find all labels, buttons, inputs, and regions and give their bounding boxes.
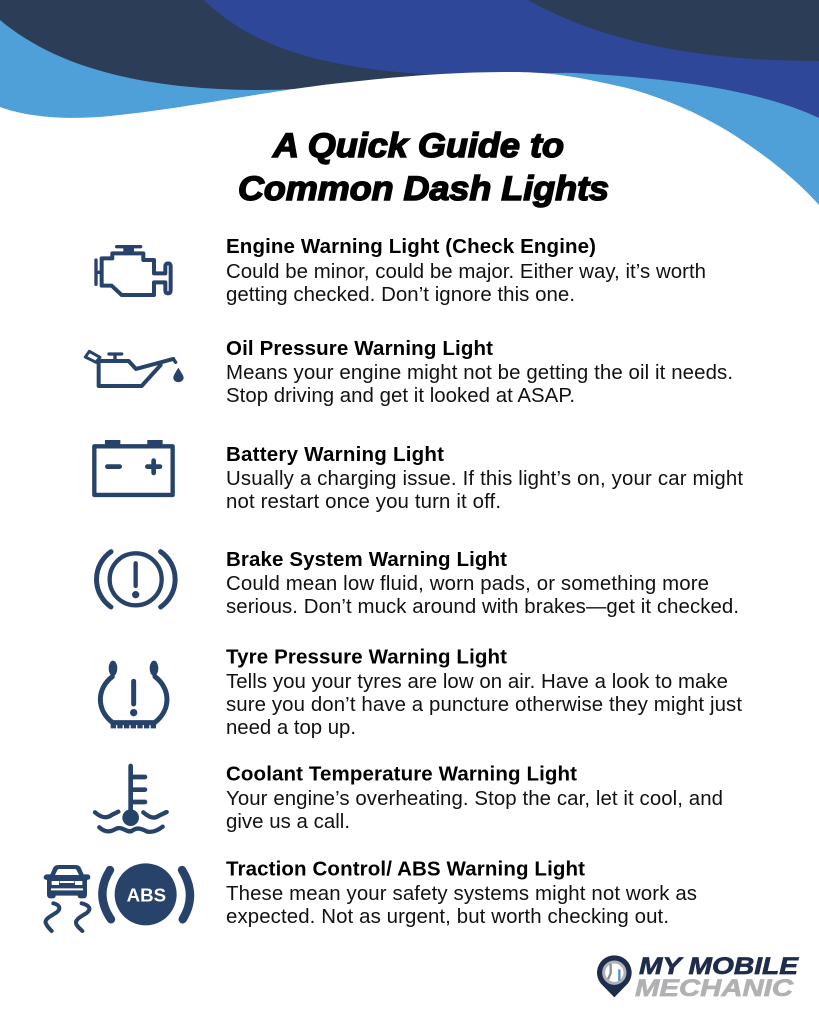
title: Common Dash Lights	[238, 170, 609, 208]
icon: tyre	[100, 661, 167, 725]
icon: ABS: ABS	[127, 884, 166, 905]
header wave background	[0, 0, 819, 240]
item: traction control and ABS text: These mean your safety systems might not work as	[226, 883, 697, 905]
item: brake system text: Brake System Warning Light	[226, 548, 507, 571]
item: brake system text: Could mean low fluid, worn pads, or something more	[226, 573, 709, 595]
icon: coolant	[95, 766, 167, 832]
logo	[597, 953, 799, 1002]
logo text	[635, 953, 799, 1002]
title	[238, 127, 609, 208]
icon: battery	[94, 440, 173, 495]
item: tyre pressure text: need a top up.	[226, 717, 356, 739]
item: engine warning light text: Engine Warning Light (Check Engine)	[226, 235, 596, 258]
icon: logo location pin	[597, 955, 632, 997]
item: tyre pressure text: sure you don’t have a puncture otherwise they might just	[226, 694, 742, 716]
item: engine warning light text: getting checked. Don’t ignore this one.	[226, 284, 575, 306]
icon: ABS	[102, 863, 190, 925]
logo text: MY MOBILE	[639, 953, 799, 980]
item: coolant temperature text: Your engine’s overheating. Stop the car, let it cool, and	[226, 788, 723, 810]
item: oil pressure text: Oil Pressure Warning Light	[226, 337, 493, 360]
item: battery text: Usually a charging issue. If this light’s on, your car might	[226, 468, 743, 490]
item: traction control and ABS text: Traction Control/ ABS Warning Light	[226, 858, 585, 880]
item: tyre pressure text: Tells you your tyres are low on air. Have a look to make	[226, 671, 728, 693]
icon: brake	[97, 552, 175, 607]
logo text: MECHANIC	[635, 975, 793, 1002]
item: coolant temperature text: give us a call.	[226, 811, 350, 833]
icon: oil can	[85, 351, 184, 386]
title: A Quick Guide to	[272, 127, 564, 165]
icon: traction control	[44, 865, 90, 931]
item: oil pressure text: Stop driving and get it looked at ASAP.	[226, 385, 575, 407]
item: oil pressure text: Means your engine might not be getting the oil it needs.	[226, 362, 733, 384]
item: battery text: not restart once you turn it off.	[226, 491, 501, 513]
icon: engine	[96, 247, 171, 295]
item: brake system text: serious. Don’t muck around with brakes—get it checked.	[226, 596, 739, 618]
item: engine warning light text: Could be minor, could be major. Either way, it’s worth	[226, 261, 706, 283]
item: coolant temperature text: Coolant Temperature Warning Light	[226, 762, 577, 786]
item: traction control and ABS text: expected. Not as urgent, but worth checking out.	[226, 906, 669, 928]
item: battery text: Battery Warning Light	[226, 443, 444, 466]
item: tyre pressure text: Tyre Pressure Warning Light	[226, 646, 507, 668]
